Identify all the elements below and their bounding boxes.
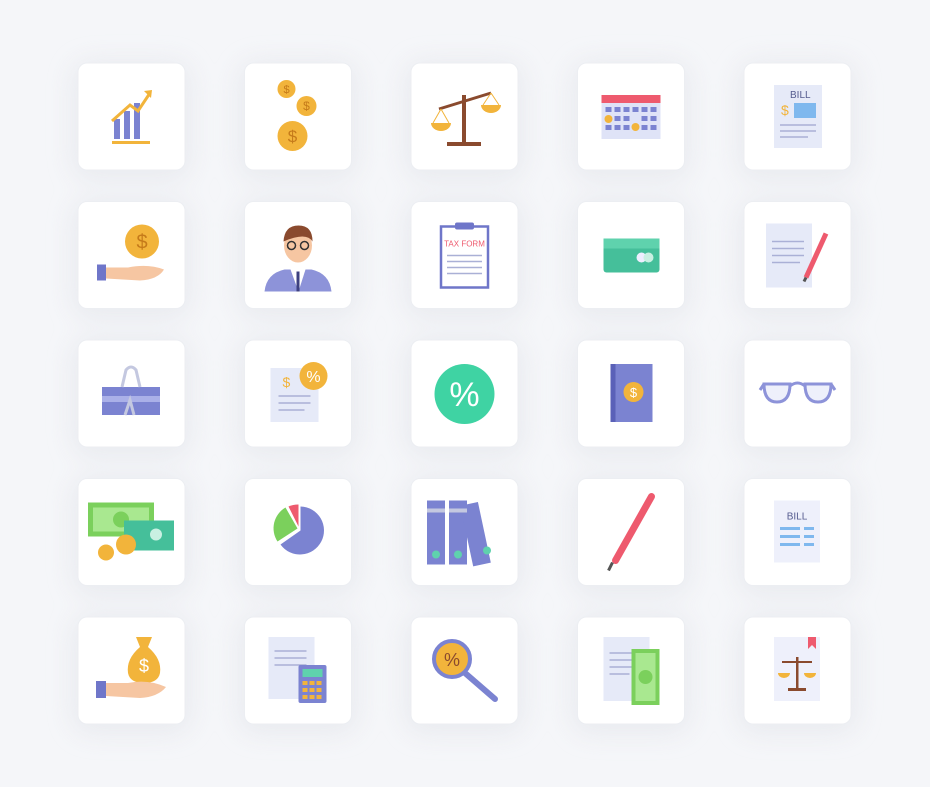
icon tile: credit card xyxy=(578,202,684,308)
icon tile: book with coin xyxy=(578,340,684,447)
icon tile: glasses xyxy=(744,340,851,447)
icon tile: bill receipt xyxy=(744,478,851,586)
icon tile: coins xyxy=(244,63,352,170)
icon tile: bill document xyxy=(744,63,851,170)
icon tile: document with pen xyxy=(744,202,851,308)
icon tile: hand with coin: $ xyxy=(136,232,148,254)
icon tile: calendar xyxy=(578,63,684,170)
icon tile: bill receipt: BILL xyxy=(787,512,808,522)
icon tile: pencil xyxy=(578,478,684,586)
icon tile: binder clip xyxy=(78,340,185,447)
icon tile: bill document: BILL xyxy=(790,90,811,101)
icon tile: bill document: $ xyxy=(781,102,789,118)
icon tile: magnifier with percent: % xyxy=(444,650,460,670)
icon tile: magnifier with percent xyxy=(411,617,518,724)
icon tile: book with coin: $ xyxy=(630,385,638,400)
icon tile: businessman xyxy=(244,202,352,308)
icon tile: percent circle: % xyxy=(449,376,480,414)
icon tile: hand with money bag: $ xyxy=(139,656,149,676)
icon tile: percent circle xyxy=(411,340,518,447)
icon tile: hand with coin xyxy=(78,202,185,308)
icon tile: coins: $ xyxy=(283,84,290,96)
icon tile: document with money xyxy=(578,617,684,724)
icon tile: growth chart xyxy=(78,63,185,170)
icon tile: coins: $ xyxy=(303,99,310,113)
icon tile: binders xyxy=(411,478,518,586)
icon tile: receipt with percent: % xyxy=(306,369,321,386)
icon tile: receipt with percent: $ xyxy=(282,374,290,390)
icon tile: receipt with percent xyxy=(244,340,352,447)
icon tile: tax form clipboard xyxy=(411,202,518,308)
icon tile: coins: $ xyxy=(288,127,298,146)
icon tile: tax form clipboard: TAX FORM xyxy=(444,240,485,248)
icon tile: money bills and coins xyxy=(78,478,185,586)
icon tile: document with scale xyxy=(744,617,851,724)
icon tile: document and calculator xyxy=(244,617,352,724)
icon tile: balance scale xyxy=(411,63,518,170)
icon tile: hand with money bag xyxy=(78,617,185,724)
icon tile: pie chart xyxy=(244,478,352,586)
